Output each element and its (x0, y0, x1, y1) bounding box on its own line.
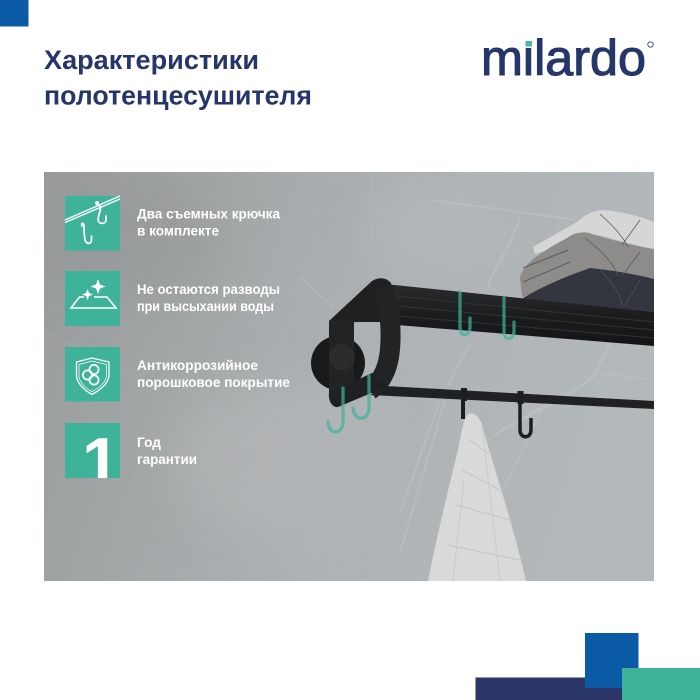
wall background (44, 172, 654, 581)
feature: anti-corrosion coating (65, 347, 290, 402)
white towel (533, 210, 654, 254)
text: anti-corrosion coating: Антикоррозийное (137, 358, 258, 373)
upper shelf rails (385, 284, 654, 346)
text: warranty: гарантии (137, 452, 197, 467)
decorative corner blocks (476, 633, 700, 700)
text: anti-corrosion coating (137, 358, 290, 390)
icon: shield with molecules (65, 347, 120, 402)
bracket lower arm (328, 373, 372, 408)
icon: two hooks on a rail (65, 196, 120, 250)
feature: removable hooks (65, 196, 280, 250)
text: removable hooks (137, 209, 280, 236)
grey towel (520, 232, 654, 297)
bracket loop tube (370, 288, 390, 390)
title (44, 45, 312, 110)
title: Характеристики (44, 45, 259, 75)
green highlighted hooks (328, 292, 514, 432)
icon: number one: 1 (82, 424, 120, 500)
text: warranty: Год (137, 435, 161, 450)
wall mount disk (311, 336, 365, 390)
text: warranty (137, 435, 197, 467)
text: no water marks: Не остаются разводы (137, 282, 280, 297)
mount cap (329, 344, 355, 370)
bracket arm (329, 321, 354, 395)
text: anti-corrosion coating: порошковое покрытие (137, 375, 290, 390)
logo: milardo: milardo (481, 30, 646, 86)
bracket top arm (329, 278, 393, 322)
feature: warranty (65, 423, 196, 478)
photo panel: wall with towel rack (40, 172, 654, 581)
decorative corner square (0, 0, 28, 26)
text: removable hooks: в комплекте (137, 224, 219, 238)
text: removable hooks: Два съемных крючка (137, 206, 280, 222)
navy towel (523, 268, 654, 312)
text: no water marks (137, 282, 280, 314)
towels on the shelf (520, 210, 654, 312)
lower hanging bar (370, 386, 654, 409)
text: no water marks: при высыхании воды (137, 299, 274, 314)
white hanging towel (428, 413, 526, 581)
title: полотенцесушителя (44, 80, 312, 110)
bar hooks (461, 401, 465, 419)
towel rack (311, 278, 654, 437)
feature: no water marks (65, 271, 280, 326)
icon: shining surface (65, 271, 120, 326)
